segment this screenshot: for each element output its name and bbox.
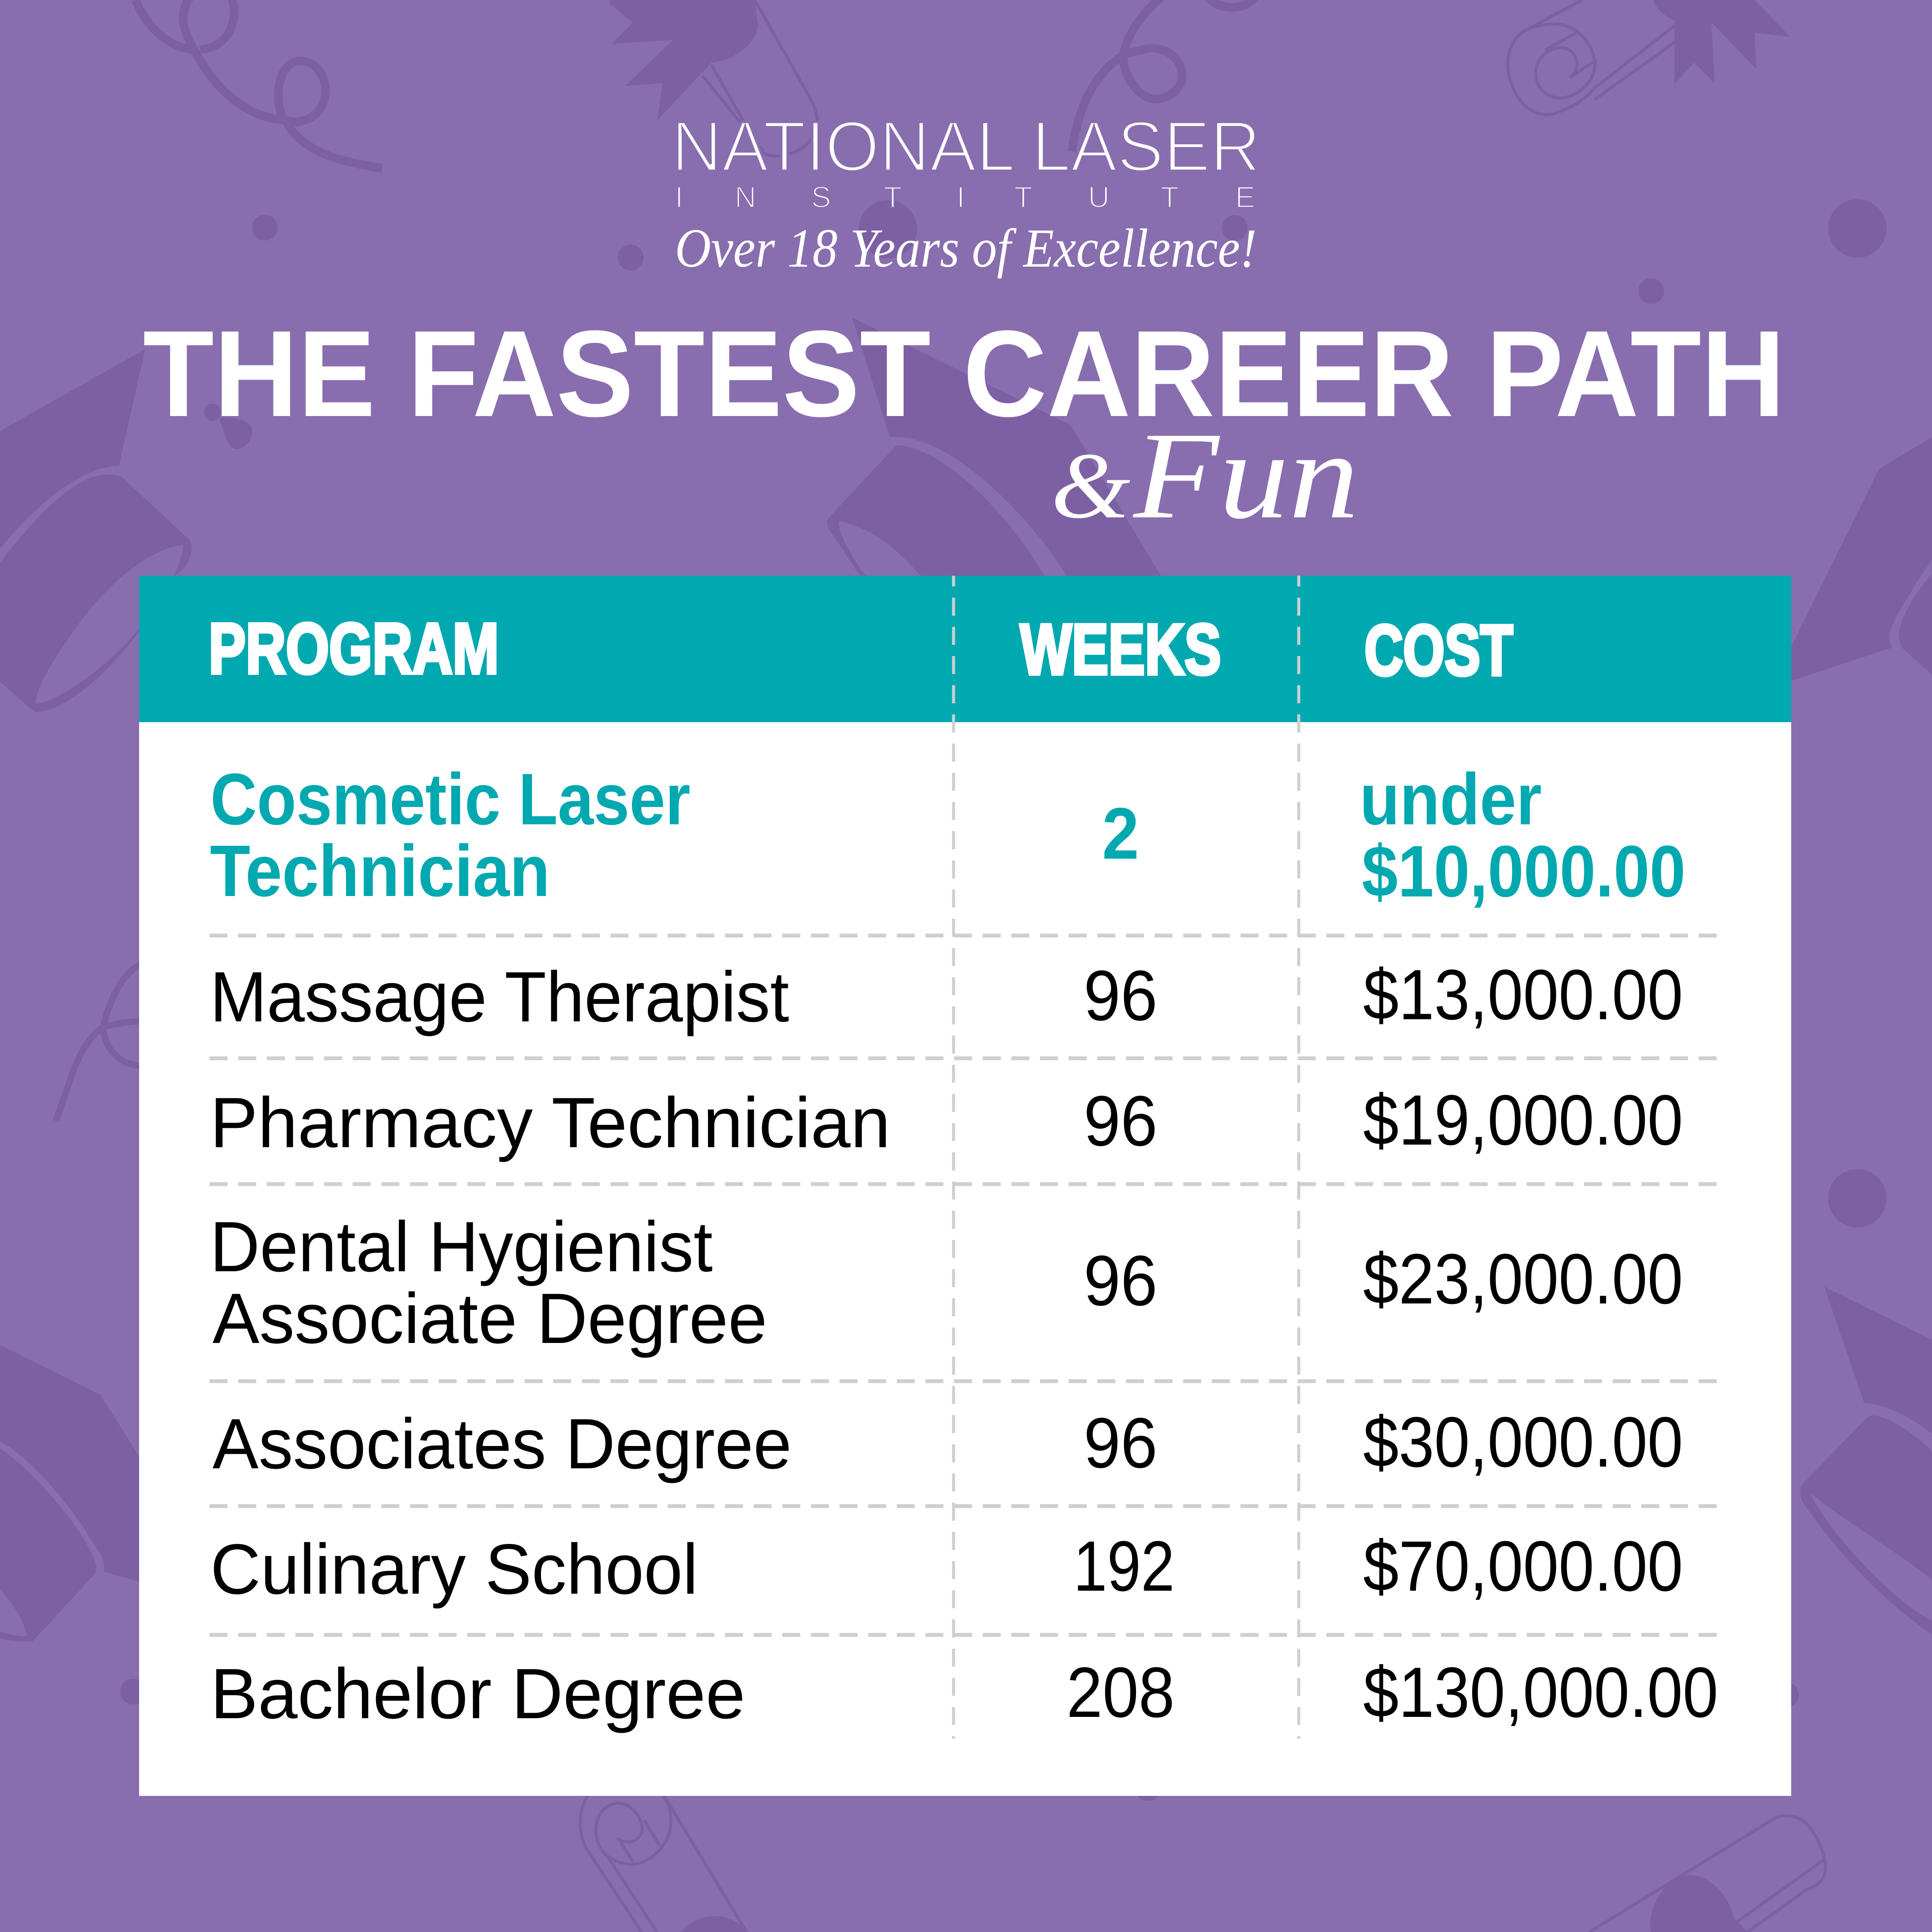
table header labels: PROGRAM: [209, 609, 499, 689]
row: Dental Hygienist Associate Degree: Associate Degree: [213, 1279, 767, 1358]
row: Culinary School: [210, 1527, 1683, 1609]
row: Pharmacy Technician: 96: [1084, 1081, 1157, 1161]
row: Cosmetic Laser Technician: $10,000.00: [1362, 831, 1686, 912]
icon: left side squiggle: [56, 964, 142, 1121]
row: Cosmetic Laser Technician: under: [1360, 759, 1542, 840]
tagline: Over 18 Years of Excellence!: [675, 218, 1257, 279]
icon: top ribbon star right: [1653, 0, 1790, 84]
bottom-left scroll: [580, 1796, 644, 1932]
row: Associates Degree: Associates Degree: [213, 1404, 792, 1484]
row: Bachelor Degree: Bachelor Degree: [210, 1654, 745, 1734]
icon: bottom scroll seal right: [1650, 1875, 1747, 1932]
row: Massage Therapist: $13,000.00: [1363, 955, 1683, 1035]
row: Pharmacy Technician: Pharmacy Technician: [210, 1083, 890, 1163]
row: Dental Hygienist Associate Degree: [210, 1207, 1683, 1358]
icon: scroll outlines: [580, 0, 1826, 1932]
row: Dental Hygienist Associate Degree: Dental Hygienist: [210, 1207, 713, 1287]
row: Culinary School: 192: [1073, 1527, 1175, 1606]
bottom-right scroll: [1589, 1816, 1826, 1932]
subtitle: & Fun: Fun: [1131, 407, 1359, 544]
top-left scroll: [711, 0, 817, 156]
table body: [139, 576, 1791, 1796]
row: Cosmetic Laser Technician: Cosmetic Laser: [210, 759, 690, 840]
row: Massage Therapist: 96: [1084, 956, 1157, 1036]
icon: bottom scroll seal left: [675, 1916, 754, 1932]
row: Dental Hygienist Associate Degree: $23,000.00: [1363, 1239, 1683, 1319]
top-right scroll: [1508, 0, 1674, 115]
subtitle: & Fun: [1051, 407, 1359, 544]
table header labels: [209, 609, 1513, 690]
row: Pharmacy Technician: $19,000.00: [1363, 1081, 1683, 1160]
row: Cosmetic Laser Technician: [210, 759, 1686, 912]
icon: right graduation cap: [1791, 437, 1932, 681]
logo wordmark: NATIONAL LASER: [671, 107, 1261, 186]
row: Bachelor Degree: [210, 1653, 1718, 1734]
row: Associates Degree: [213, 1403, 1683, 1484]
icon: lower-right graduation cap: [1800, 1287, 1932, 1634]
icon: left graduation cap: [0, 349, 192, 712]
row: Culinary School: Culinary School: [210, 1530, 698, 1609]
row: Pharmacy Technician: [210, 1081, 1683, 1163]
row: Associates Degree: 96: [1084, 1403, 1157, 1483]
row: Massage Therapist: [210, 955, 1683, 1037]
table header labels: COST: [1364, 611, 1513, 690]
decorative squiggles: [136, 0, 1256, 168]
row: Cosmetic Laser Technician: 2: [1102, 793, 1139, 875]
icon: top ribbon star left: [610, 0, 758, 120]
subtitle: & Fun: &: [1051, 433, 1130, 538]
row: Associates Degree: $30,000.00: [1363, 1403, 1683, 1482]
panel: comparison table: [139, 576, 1791, 1796]
icon: lower-left graduation cap: [0, 1345, 139, 1642]
logo subline: INSTITUTE: [675, 180, 1255, 214]
table header labels: WEEKS: [1020, 610, 1221, 690]
title: THE FASTEST CAREER PATH: [143, 305, 1785, 442]
dots: [120, 199, 1886, 1801]
row: Cosmetic Laser Technician: Technician: [210, 830, 550, 912]
table header band: [139, 576, 1791, 722]
row: Bachelor Degree: $130,000.00: [1363, 1653, 1718, 1732]
row: Dental Hygienist Associate Degree: 96: [1084, 1241, 1157, 1321]
icon: centre graduation cap: [827, 318, 1163, 580]
row: Massage Therapist: Massage Therapist: [210, 957, 789, 1037]
row: Bachelor Degree: 208: [1066, 1653, 1175, 1732]
row: Culinary School: $70,000.00: [1363, 1527, 1683, 1606]
logo: National Laser Institute: [671, 107, 1261, 279]
